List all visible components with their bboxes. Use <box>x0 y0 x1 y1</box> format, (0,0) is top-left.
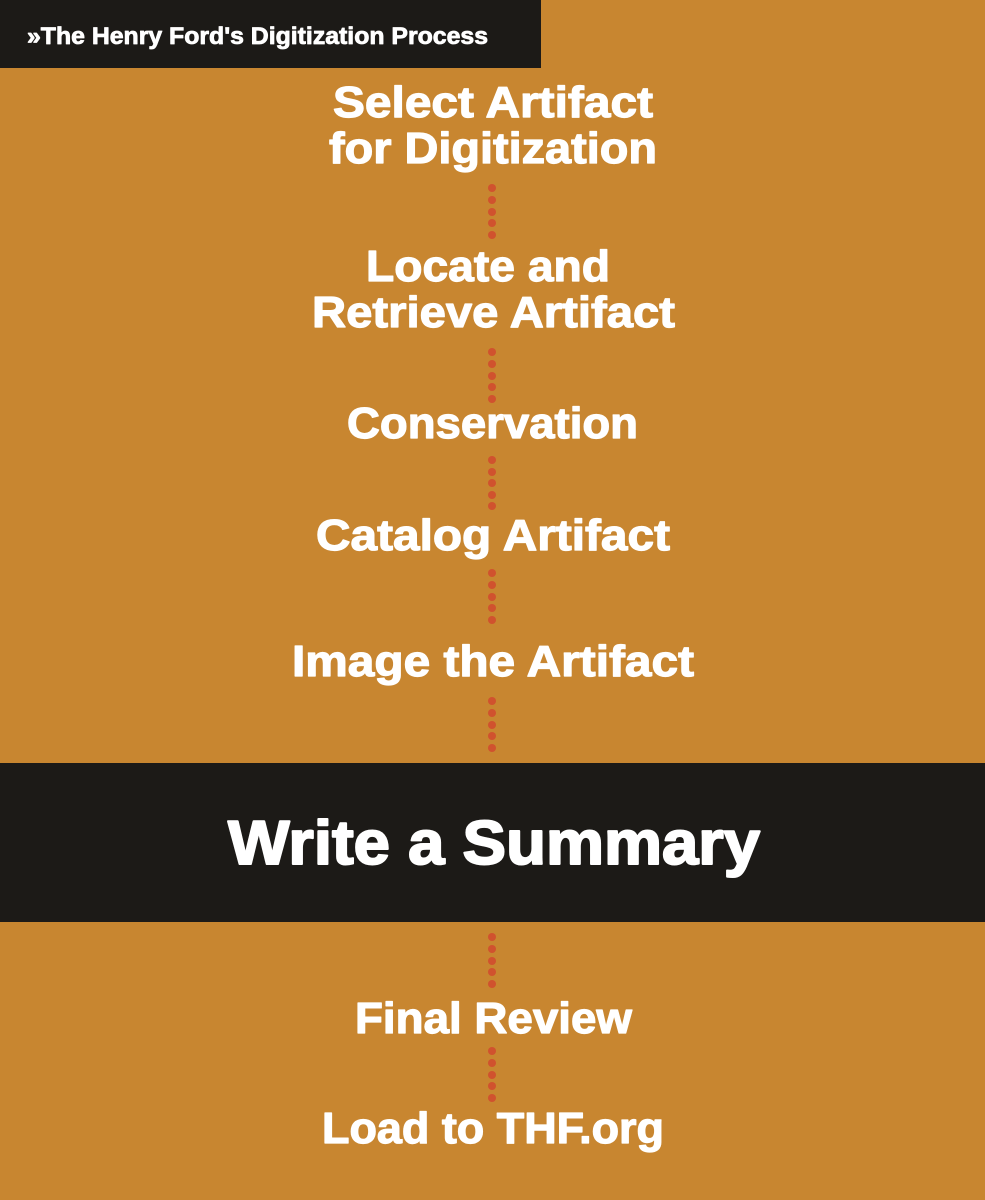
header bar <box>0 0 541 68</box>
step: select artifact: for Digitization <box>329 124 657 173</box>
step: conservation: Conservation <box>347 399 638 448</box>
step: catalog: Catalog Artifact <box>316 511 670 560</box>
connector dots 6 <box>488 933 496 988</box>
highlighted step: write a summary: Write a Summary <box>228 809 761 878</box>
connector dots 1 <box>488 184 496 239</box>
connector dots 7 <box>488 1047 496 1102</box>
step: final review: Final Review <box>355 994 633 1043</box>
step: locate and retrieve: Locate and <box>366 242 610 291</box>
highlighted step: write a summary <box>0 763 985 922</box>
step: load: Load to THF.org <box>322 1104 664 1153</box>
step: select artifact: Select Artifact <box>333 78 653 127</box>
connector dots 3 <box>488 456 496 510</box>
step: locate and retrieve <box>312 242 675 337</box>
step: select artifact <box>329 78 657 173</box>
connector dots 5 <box>488 697 496 752</box>
step: image: Image the Artifact <box>292 637 694 686</box>
step: locate and retrieve: Retrieve Artifact <box>312 288 675 337</box>
connector dots 2 <box>488 348 496 403</box>
header bar: »The Henry Ford's Digitization Process <box>27 23 488 50</box>
connector dots 4 <box>488 569 496 624</box>
